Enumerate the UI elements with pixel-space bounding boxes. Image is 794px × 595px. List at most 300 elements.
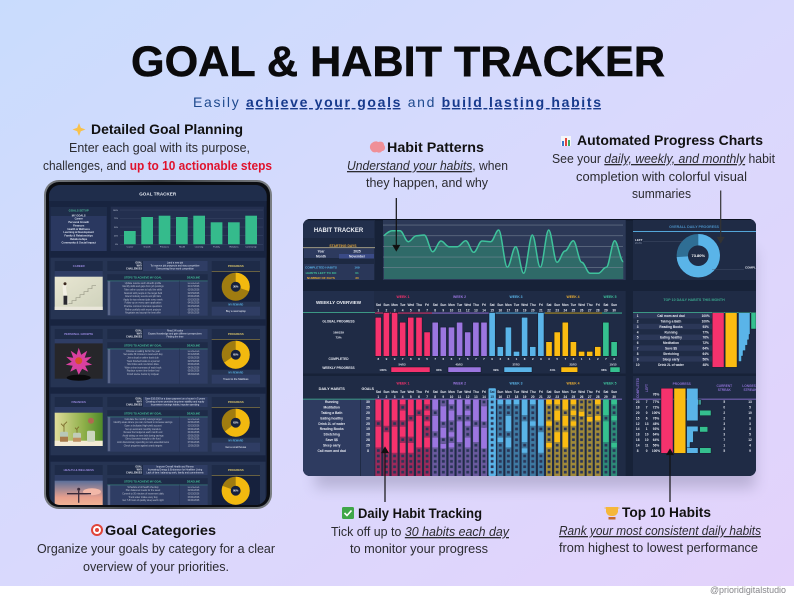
- goal section: personal growth: 03/01/2026: [188, 364, 200, 366]
- stat rows: 13: [748, 400, 752, 404]
- panel: tracker settings: HABIT TRACKER: [314, 228, 364, 234]
- day names and dates: 18: [515, 395, 518, 399]
- goal section: personal growth: Expand knowledge and gain different perspectives: [148, 332, 202, 335]
- day names and dates: 2: [386, 308, 388, 312]
- panel: overall daily progress donut: 73.80%: [692, 253, 706, 258]
- day names and dates: 13: [474, 395, 478, 399]
- stat rows: 8: [637, 449, 639, 453]
- goals setup table: MY GOALS: [72, 214, 86, 218]
- day names and dates: Sat: [547, 303, 552, 307]
- panel: weekly overview: [303, 291, 626, 374]
- weekly progress bars: 22/53: [570, 362, 577, 366]
- goal section: health and wellness: 02/01/2026: [188, 490, 200, 492]
- ranking list: 1: [637, 314, 639, 318]
- day names and dates: 28: [596, 395, 600, 399]
- goal section: career: Network with people in the target field: [124, 292, 163, 295]
- goals bar chart: 75%: [114, 218, 118, 220]
- day names and dates: 28: [596, 308, 600, 312]
- completed counts: [378, 358, 615, 360]
- week headers: WEEK 3: [510, 382, 523, 386]
- goal section: personal growth: Finish twelve books by midyear: [127, 373, 159, 376]
- icon: trophy: [604, 507, 620, 520]
- goal section: personal growth: MY REWARD: [228, 372, 243, 375]
- weekly progress bars: 41%: [550, 368, 556, 372]
- stat rows: 3: [723, 433, 725, 437]
- goals setup table: GOALS SETUP: [69, 208, 89, 212]
- stat rows: 5: [723, 400, 725, 404]
- goals setup table: Family & Relationships: [64, 234, 94, 238]
- ranking list: 72%: [703, 341, 709, 345]
- day names and dates: 11: [458, 308, 462, 312]
- goals bar chart: 25%: [114, 236, 118, 238]
- panel: tracker settings: [303, 220, 375, 280]
- goal section: personal growth: Track finished books in a journal: [127, 360, 160, 363]
- ranking list: 64%: [703, 346, 709, 350]
- stacked rank bars: [712, 313, 756, 367]
- habit names and goals: 25: [366, 422, 370, 426]
- habit names and goals: 30: [366, 400, 370, 404]
- ranking list: 93%: [703, 325, 709, 329]
- callout: daily habit tracking: Tick off up to 30 habits each day: [331, 524, 510, 539]
- goal section: personal growth: GOAL: [135, 329, 143, 332]
- stat rows: 76%: [653, 416, 659, 420]
- screen header: GOAL TRACKER: [139, 192, 177, 196]
- day names and dates: Tue: [400, 390, 406, 394]
- panel: tracker settings: NUMBER OF DAYS: [307, 276, 335, 280]
- day names and dates: Sat: [490, 303, 496, 307]
- day names and dates: Wed: [464, 303, 471, 307]
- progress donut: 30%: [233, 285, 239, 289]
- stat rows: 1: [723, 443, 725, 447]
- weekly progress bars: 37/53: [512, 362, 520, 366]
- completed counts: 1: [589, 357, 591, 361]
- habit names and goals: 25: [366, 406, 370, 410]
- goals bar chart: 0%: [115, 244, 118, 246]
- completed counts: 8: [377, 357, 379, 361]
- empty checkbox grid: [375, 399, 619, 476]
- ranking list: 100%: [702, 319, 710, 323]
- goal section: finances: [50, 394, 266, 455]
- completed counts: 8: [410, 357, 412, 361]
- goal section: career: DEADLINE: [187, 276, 200, 280]
- goal section: finances: Check progress against yearly targets: [124, 444, 163, 447]
- callout: daily habit tracking: Daily Habit Tracking: [358, 506, 482, 521]
- day names and dates: [376, 390, 617, 398]
- panel: tracker settings: STARTING DAYS: [329, 244, 357, 248]
- day names and dates: Tue: [571, 303, 576, 307]
- callout: detailed goal planning: Detailed Goal Planning: [91, 122, 243, 137]
- goal section: health and wellness: HEALTH & WELLNESS: [64, 468, 94, 472]
- day names and dates: 27: [588, 308, 592, 312]
- day names and dates: 14: [482, 395, 486, 399]
- completed counts: 6: [508, 357, 510, 361]
- column headers: COMPLETED: [636, 377, 640, 398]
- completed counts: 5: [556, 357, 558, 361]
- goal section: finances: 02/01/2026: [188, 422, 200, 424]
- day names and dates: 18: [515, 308, 518, 312]
- callout: automated progress charts: summaries: [632, 186, 691, 201]
- progress donut: 80%: [233, 489, 239, 493]
- goal section: career: Follow up on every open application: [125, 302, 162, 305]
- stat rows: 12: [636, 422, 640, 426]
- panel: habit statistics and progress: [633, 376, 758, 476]
- callout: top 10 habits: from highest to lowest performance: [559, 540, 758, 555]
- progress donut: [226, 481, 245, 500]
- goal section: personal growth: Finding the time: [166, 335, 184, 338]
- goals bar chart: 100%: [113, 210, 118, 212]
- left labels: COMPLETED: [328, 357, 349, 361]
- week headers: WEEK 1: [396, 382, 410, 386]
- day names and dates: Thu: [587, 390, 593, 394]
- goal section: health and wellness: Track water intake every day: [128, 496, 158, 499]
- photo: yoga at sunset: [54, 480, 103, 505]
- goals setup table: Health & Wellness: [67, 227, 90, 231]
- day names and dates: Fri: [596, 390, 600, 394]
- highlighted today column: [488, 388, 496, 476]
- habit names and goals: 28: [366, 433, 370, 437]
- day names and dates: Wed: [578, 303, 585, 307]
- day names and dates: 24: [564, 395, 567, 399]
- goal section: finances: Avoid taking on new debt during savings: [122, 434, 164, 437]
- goal section: career: Overcoming fierce work competition: [156, 267, 195, 270]
- stat rows: 100%: [652, 449, 660, 453]
- stat rows: 7: [723, 438, 725, 442]
- weekly progress bars: 45/53: [456, 362, 463, 366]
- day names and dates: Thu: [530, 390, 536, 394]
- ranking list: Meditation: [663, 341, 679, 345]
- day names and dates: Sun: [554, 303, 560, 307]
- weekly progress bars: 69%: [493, 368, 499, 372]
- goal section: personal growth: DEADLINE: [187, 344, 200, 348]
- callout: goal categories: [37, 523, 276, 574]
- goals bar chart: 50%: [114, 227, 118, 229]
- panel: overall daily progress donut: [633, 220, 765, 280]
- completed counts: 7: [605, 357, 607, 361]
- stat rows: 100%: [652, 411, 660, 415]
- panel: overall daily progress donut: COMPLETED: [745, 266, 765, 270]
- day names and dates: Sun: [497, 390, 503, 394]
- day names and dates: 16: [499, 308, 502, 312]
- goal section: finances: 03/01/2026: [188, 429, 200, 431]
- goal section: finances: Get a small house: [225, 445, 247, 449]
- goal section: finances: Set up automatic monthly transfers: [125, 428, 162, 431]
- stat rows: 10: [645, 438, 649, 442]
- panel: daily habits grid: GOALS: [361, 387, 375, 391]
- day names and dates: 22: [547, 395, 551, 399]
- habit names and goals: Taking a Bath: [321, 411, 342, 415]
- goal section: personal growth: 05/01/2026: [188, 371, 200, 373]
- day names and dates: 4: [402, 308, 404, 312]
- progress donut: [226, 345, 245, 364]
- goals setup table: Career: [75, 217, 83, 221]
- completed counts: 3: [548, 357, 550, 361]
- goals setup table: [51, 207, 107, 251]
- ranking list: 8: [637, 352, 639, 356]
- column headers: STREAK: [718, 388, 732, 392]
- panel: weekly overview: WEEKLY OVERVIEW: [316, 300, 362, 305]
- day names and dates: Mon: [391, 390, 398, 394]
- habit names and goals: [317, 400, 370, 453]
- goals setup table: Relationships: [70, 237, 88, 241]
- goal section: finances: 01/15/2026: [188, 419, 200, 421]
- panel: tracker settings: Month: [316, 254, 326, 258]
- day names and dates: Sat: [433, 390, 439, 394]
- stat rows: 3: [749, 422, 751, 426]
- day names and dates: Sat: [490, 390, 496, 394]
- weekly progress bars: [379, 362, 620, 372]
- ranking list: 7: [637, 346, 639, 350]
- goal section: finances: Inconsistent savings habits; impulse spending: [151, 403, 200, 406]
- completed counts: 6: [451, 357, 453, 361]
- week headers: WEEK 4: [566, 382, 580, 386]
- icon: check box: [342, 507, 354, 519]
- day names and dates: Tue: [457, 390, 463, 394]
- callout: top 10 habits: Top 10 Habits: [622, 505, 711, 520]
- day names and dates: 6: [418, 395, 420, 399]
- day names and dates: 15: [490, 395, 494, 399]
- callout: detailed goal planning: challenges, and up to 10 actionable steps: [43, 158, 272, 173]
- goal section: health and wellness: DEADLINE: [187, 480, 200, 484]
- day names and dates: Sun: [554, 390, 560, 394]
- goal section: finances: WHY: [137, 401, 142, 403]
- goal section: personal growth: 02/01/2026: [188, 358, 200, 360]
- stat rows: 4: [749, 443, 751, 447]
- goal section: finances: Save $10,000 for a down payment on a house in 5 years: [145, 397, 206, 400]
- day names and dates: 9: [442, 308, 444, 312]
- day names and dates: Wed: [464, 390, 471, 394]
- day names and dates: Tue: [457, 303, 463, 307]
- day names and dates: Wed: [407, 303, 414, 307]
- week labels: WEEK 5: [604, 295, 617, 299]
- day names and dates: 3: [394, 308, 396, 312]
- goal section: health and wellness: Increasing Energy & Endurance for Healthier Living: [148, 468, 203, 471]
- goal section: health and wellness: Lack of time: balancing work, family and commitments: [146, 471, 204, 474]
- ranking list: Taking a Bath: [661, 319, 681, 323]
- stat rows: 93%: [653, 427, 659, 431]
- callout: top 10 habits: Rank your most consistent daily habits: [559, 523, 761, 538]
- habit names and goals: 8: [367, 449, 369, 453]
- goal section: health and wellness: Get 7-8 hours of quality sleep each night: [122, 499, 164, 502]
- goal section: career: 02/15/2026: [188, 293, 200, 295]
- ranking list: Drink 2L of water: [658, 363, 685, 367]
- stat rows: 3: [723, 422, 725, 426]
- goals setup table: Personal Growth: [68, 220, 89, 224]
- goal section: career: Take online courses to build the skills: [124, 289, 163, 292]
- day names and dates: 21: [539, 308, 543, 312]
- stat rows: 5: [723, 449, 725, 453]
- stat rows: 6: [646, 416, 648, 420]
- ranking list: 10: [636, 363, 640, 367]
- ranking list: 4: [637, 330, 639, 334]
- completed counts: 9: [491, 357, 493, 361]
- goal section: career: [50, 258, 266, 319]
- habit tracker dashboard: [303, 219, 765, 476]
- goal section: finances: Limit discretionary spending on non-essential items: [117, 441, 170, 444]
- icon: brain: [370, 141, 385, 153]
- callout: automated progress charts: Automated Progress Charts: [577, 133, 763, 148]
- day names and dates: Sat: [376, 303, 382, 307]
- photo: pink lotus: [55, 343, 103, 381]
- day names and dates: Sun: [440, 390, 446, 394]
- day names and dates: Tue: [514, 390, 519, 394]
- panel: tracker settings: 30: [355, 276, 359, 280]
- column headers: LEFT: [645, 384, 649, 392]
- day names and dates: 10: [450, 395, 453, 399]
- weekly progress bars: 84%: [436, 368, 442, 372]
- day names and dates: 16: [499, 395, 502, 399]
- day names and dates: 8: [434, 395, 436, 399]
- day names and dates: Sat: [547, 390, 552, 394]
- tablet frame: [44, 180, 272, 509]
- habit names and goals: Reading Books: [320, 427, 344, 431]
- day names and dates: 29: [604, 308, 608, 312]
- week labels: [396, 296, 616, 298]
- habit names and goals: 20: [366, 416, 370, 420]
- completed counts: 2: [499, 357, 501, 361]
- day names and dates: Sun: [611, 390, 617, 394]
- stat rows: 5: [749, 406, 751, 410]
- completed counts: 7: [459, 357, 461, 361]
- week headers: WEEK 2: [453, 382, 466, 386]
- goal section: career: Apply for two relevant jobs every week: [123, 298, 163, 301]
- stat rows: 12: [748, 438, 752, 442]
- stat rows: 18: [636, 406, 640, 410]
- day names and dates: 19: [523, 395, 527, 399]
- day names and dates: [376, 304, 617, 312]
- callout: automated progress charts: See your daily, weekly, and monthly habit: [552, 151, 775, 166]
- goal section: personal growth: Set aside 30 minutes to read each day: [123, 353, 163, 356]
- callout: automated progress charts: completion with colorful visual: [576, 169, 747, 184]
- goal section: career: Practice common interview questions: [124, 305, 163, 308]
- goal section: health and wellness: Improve Overall Health and Fitness: [156, 465, 195, 468]
- goal section: career: CHALLENGES: [126, 267, 142, 270]
- goal section: career: 04/15/2026: [188, 306, 200, 308]
- day names and dates: Thu: [473, 390, 479, 394]
- day names and dates: 14: [482, 308, 486, 312]
- goal section: finances: Open a dedicated high-yield account: [124, 425, 162, 428]
- column headers: [636, 377, 758, 398]
- habit names and goals: 20: [366, 411, 370, 415]
- area chart: daily completion: [383, 220, 626, 280]
- goal section: health and wellness: STEPS TO ACHIEVE MY GOAL: [124, 480, 162, 484]
- completed counts: 9: [394, 357, 396, 361]
- day names and dates: Fri: [539, 303, 543, 307]
- callout: goal categories: overview of your priorities.: [83, 559, 229, 574]
- stat rows: 2: [723, 416, 725, 420]
- stat rows: 1: [646, 427, 648, 431]
- stat rows: 11: [645, 443, 649, 447]
- photo: coin jars with plants: [55, 413, 103, 446]
- day names and dates: 1: [377, 308, 379, 312]
- week labels: WEEK 2: [453, 295, 466, 299]
- goal section: health and wellness: Plan balanced meals for the week: [126, 489, 161, 492]
- stat rows: 15: [636, 416, 640, 420]
- goal section: personal growth: PERSONAL GROWTH: [64, 332, 93, 336]
- ranking list: 3: [637, 325, 639, 329]
- day names and dates: 5: [410, 395, 412, 399]
- day names and dates: 30: [612, 308, 616, 312]
- stat rows: 2: [723, 411, 725, 415]
- goal section: health and wellness: [50, 462, 266, 505]
- callout: goal categories: Organize your goals by category for a clear: [37, 541, 276, 556]
- goal section: personal growth: 01/05/2026: [188, 351, 200, 353]
- day names and dates: 20: [531, 395, 535, 399]
- panel: daily habits grid: DAILY HABITS: [319, 387, 345, 391]
- ranking list: Sleep early: [663, 357, 680, 361]
- panel: top 10 daily habits: [633, 291, 756, 374]
- goal section: career: 03/01/2026: [188, 296, 200, 298]
- day names and dates: Thu: [416, 303, 422, 307]
- day names and dates: 10: [450, 308, 453, 312]
- day names and dates: Mon: [391, 303, 398, 307]
- day names and dates: 22: [547, 308, 551, 312]
- goal section: career: Attend industry events and job fairs: [125, 295, 162, 298]
- goal section: personal growth: Choose a reading list for the year: [126, 350, 160, 353]
- goals setup table: Learning & Development: [63, 230, 94, 234]
- goals bar chart: Family: [213, 246, 221, 248]
- goal section: finances: Identify areas where you can cut back to increase savings: [114, 421, 173, 424]
- goal section: finances: 02/15/2026: [188, 426, 200, 428]
- goal section: finances: MY REWARD: [228, 440, 243, 443]
- goal section: career: 06/01/2026: [188, 313, 200, 315]
- progress donut: 65%: [233, 353, 239, 357]
- arrow: top 10 habits: [667, 450, 673, 502]
- completed counts: 3: [613, 357, 615, 361]
- day names and dates: Sun: [497, 303, 503, 307]
- stat rows: 6: [749, 416, 751, 420]
- goal section: career: 05/01/2026: [188, 309, 200, 311]
- ranking list: Eating healthy: [660, 336, 682, 340]
- goal section: finances: 04/01/2026: [188, 432, 200, 434]
- goal section: career: Refine portfolio with recent projects: [125, 308, 162, 311]
- goal section: career: Identify skills and gaps from job postings: [122, 285, 164, 288]
- goals bar chart: [111, 207, 264, 251]
- progress donut: [226, 413, 245, 432]
- panel: overall daily progress donut: OVERALL DAILY PROGRESS: [669, 225, 720, 229]
- ranking list: 76%: [703, 336, 709, 340]
- day names and dates: 19: [523, 308, 527, 312]
- goal section: personal growth: Mix fiction and non-fiction titles: [127, 363, 159, 366]
- ranking list: 9: [637, 357, 639, 361]
- day names and dates: Mon: [562, 303, 569, 307]
- ranking list: Reading Books: [659, 325, 683, 329]
- day names and dates: 24: [564, 308, 567, 312]
- day names and dates: Mon: [448, 390, 455, 394]
- day names and dates: 26: [580, 395, 584, 399]
- day names and dates: Sun: [383, 303, 389, 307]
- day names and dates: Mon: [505, 390, 512, 394]
- icon: target: [91, 524, 103, 536]
- goal section: career: WHY: [137, 265, 142, 267]
- ranking list: Call mom and dad: [657, 314, 685, 318]
- completed counts: 7: [475, 357, 477, 361]
- goal section: career: To improve job prospects and stay competitive: [150, 264, 200, 267]
- day names and dates: 6: [418, 308, 420, 312]
- goal section: finances: 12/01/2026: [188, 445, 200, 447]
- day names and dates: 20: [531, 308, 535, 312]
- day names and dates: Wed: [578, 390, 585, 394]
- left labels: [322, 320, 355, 370]
- icon: sparkles: [72, 123, 86, 136]
- completed counts: 9: [540, 357, 542, 361]
- stat rows: 3: [749, 427, 751, 431]
- day names and dates: Sat: [376, 390, 382, 394]
- completed counts: 7: [483, 357, 485, 361]
- habit names and goals: Save $$: [326, 438, 338, 442]
- stat rows: 14: [636, 427, 640, 431]
- day names and dates: 15: [490, 308, 494, 312]
- habit names and goals: Drink 2L of water: [318, 422, 346, 426]
